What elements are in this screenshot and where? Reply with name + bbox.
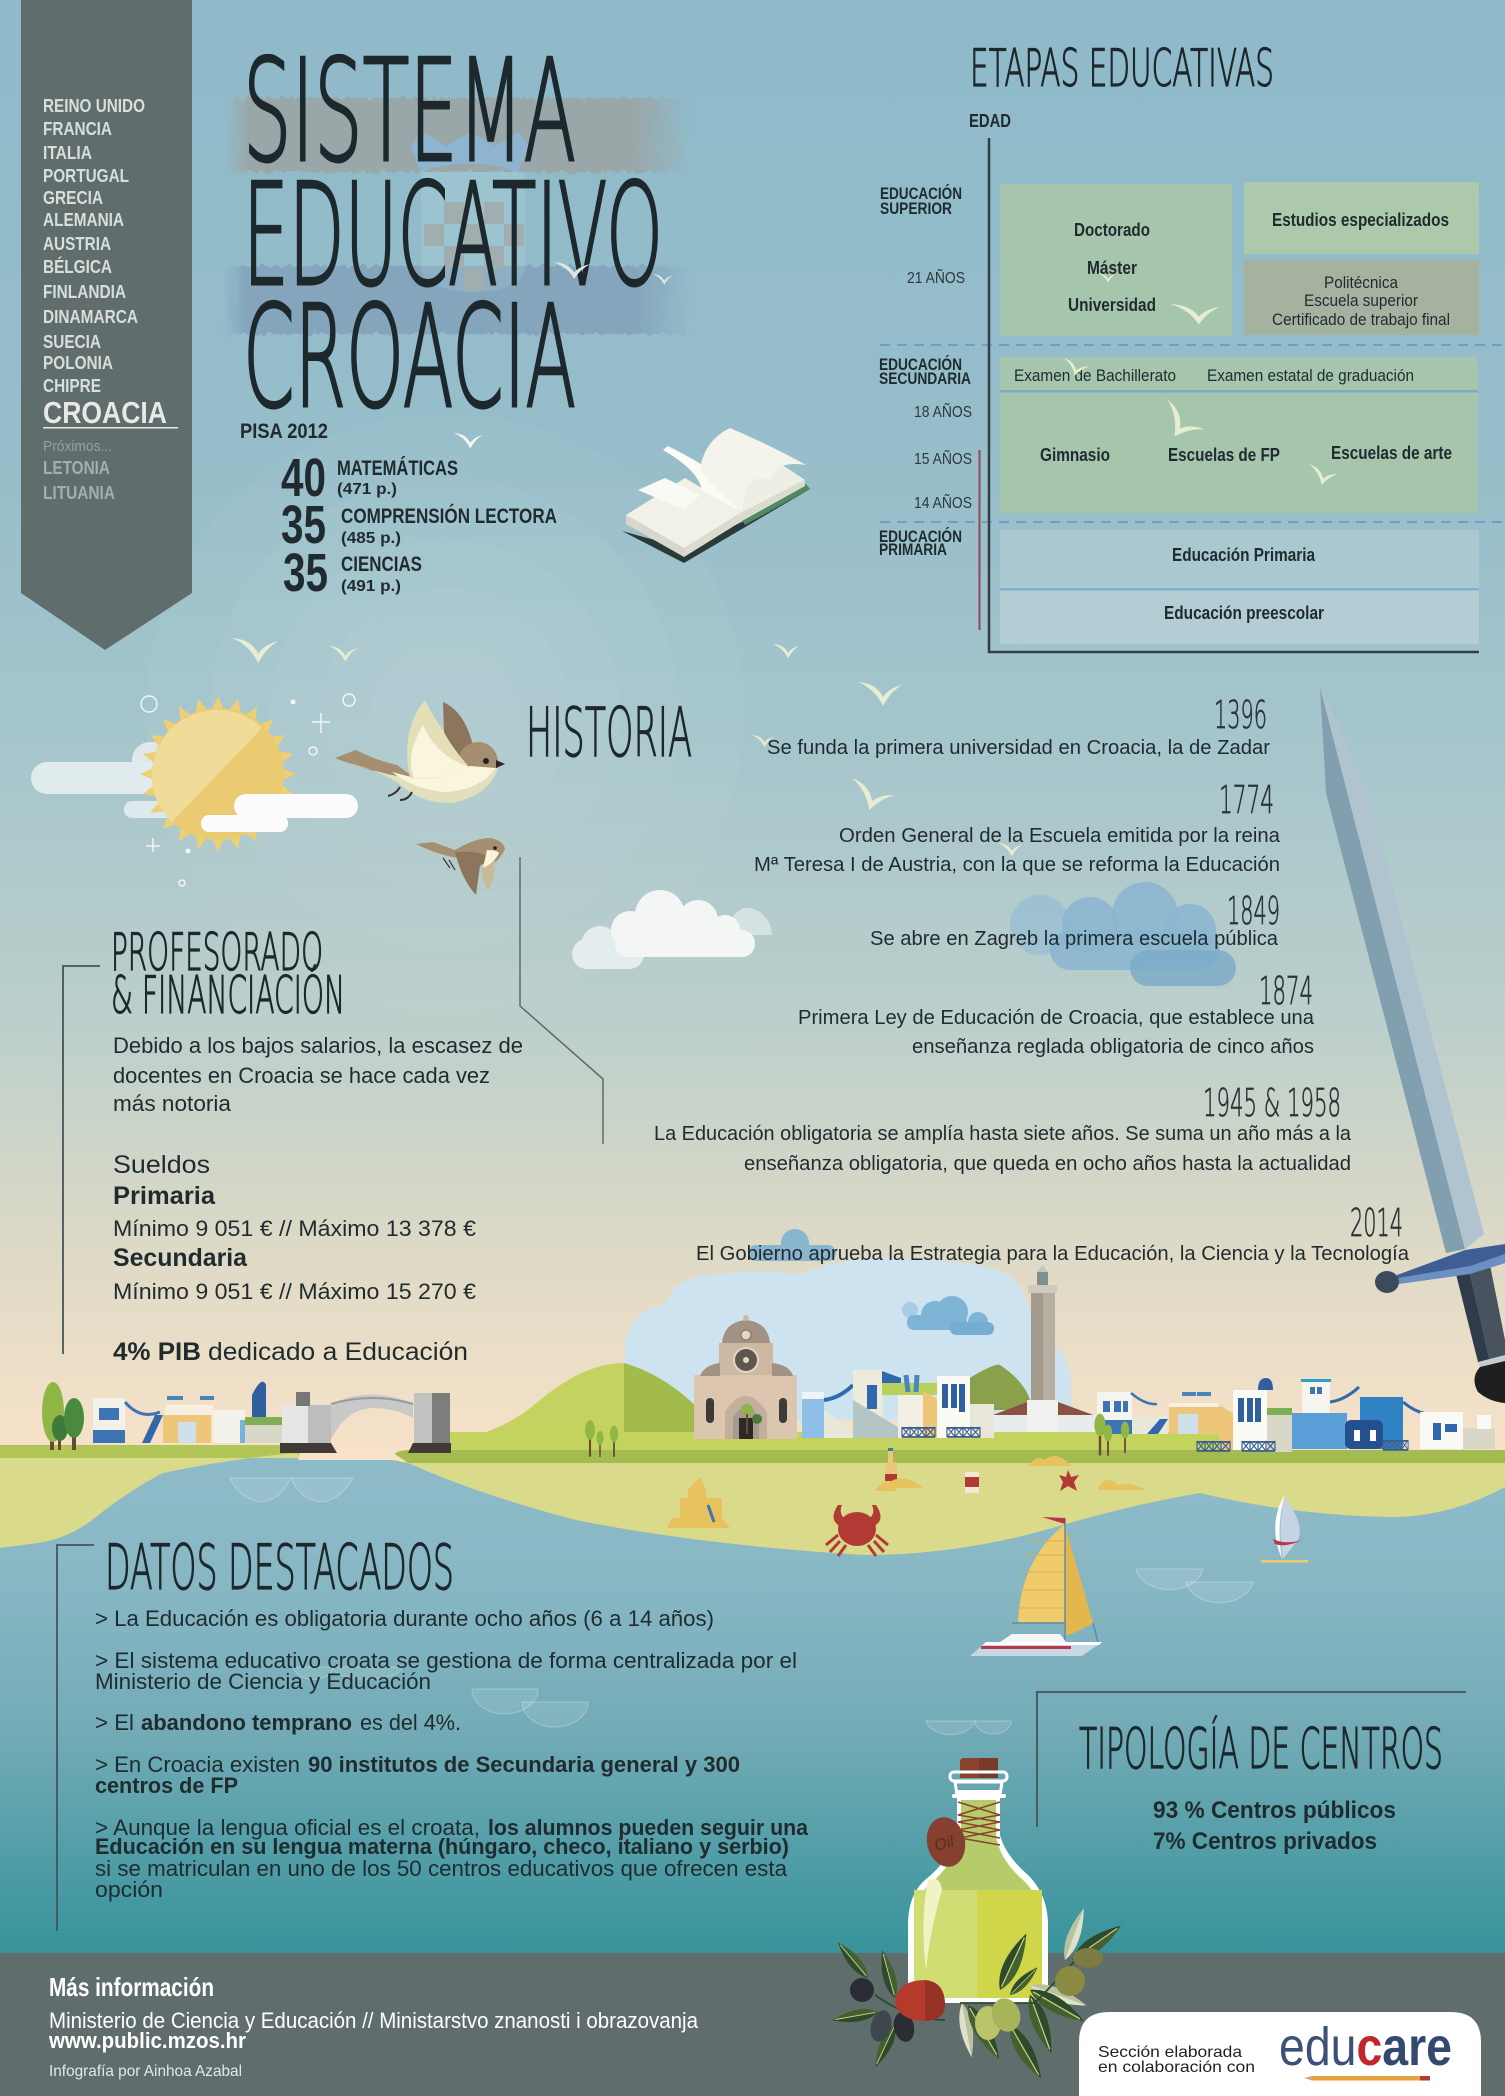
panel: etapas educativas chart: ETAPAS EDUCATIVAS [970,39,1274,99]
panel: etapas educativas chart: 18 AÑOS [914,401,972,421]
icon: sword [1320,687,1505,1403]
panel: historia timeline: enseñanza obligatoria, que queda en ocho años hasta la actualidad [744,1153,1351,1175]
panel: country list ribbon: SUECIA [43,332,101,352]
flock of small gulls [232,262,1339,856]
PISA 2012 results [240,420,557,603]
panel: country list ribbon: PORTUGAL [43,166,129,186]
panel: historia timeline: 1774 [1219,778,1274,822]
panel: country list ribbon: ITALIA [43,143,92,163]
flag brush background with Croatian crest [224,98,691,334]
icon: beer bottle [885,1448,897,1486]
bottle body [908,1790,1048,2003]
panel: etapas educativas chart: 15 AÑOS [914,448,972,468]
panel: etapas educativas chart: SUPERIOR [880,199,952,218]
panel: historia timeline: enseñanza reglada obligatoria de cinco años [912,1036,1314,1058]
title: CROACIA [243,276,576,440]
panel: datos destacados: es del 4%. [360,1710,461,1735]
icon: small sailboat [1261,1494,1308,1562]
panel: etapas educativas chart: Certificado de trabajo final [1272,310,1450,329]
panel: country list ribbon: DINAMARCA [43,307,138,327]
panel: etapas educativas chart: EDAD [969,111,1011,131]
icon: small bird [416,838,505,895]
icon: olive oil bottle with branch [831,1758,1125,2083]
icon: olive oil bottle with branch: Oil [933,1833,956,1855]
panel: datos destacados: Ministerio de Ciencia y Educación [95,1669,431,1694]
panel: profesorado y financiación: 4% PIB [113,1338,201,1366]
panel: tipología de centros [1037,1692,1466,1855]
PISA 2012 results: (491 p.) [341,578,401,595]
panel: etapas educativas chart: Politécnica [1324,273,1398,292]
panel: country list ribbon: POLONIA [43,353,113,373]
footer text: más información: Infografía por Ainhoa Azabal [49,2063,242,2080]
panel: etapas educativas chart: SECUNDARIA [879,369,971,388]
PISA 2012 results: COMPRENSIÓN LECTORA [341,504,557,528]
panel: profesorado y financiación: PROFESORADO [111,923,323,983]
panel: datos destacados: opción [95,1877,163,1902]
footer text: más información: Más información [49,1972,214,2002]
panel: profesorado y financiación: docentes en Croacia se hace cada vez [113,1063,490,1088]
panel: profesorado y financiación: & FINANCIACIÓN [111,964,345,1026]
panel: historia timeline: Primera Ley de Educación de Croacia, que establece una [798,1007,1315,1029]
panel: datos destacados: DATOS DESTACADOS [105,1531,454,1604]
oil tag [922,1814,970,1870]
icon: stone bridge [280,1392,451,1453]
panel: profesorado y financiación: Debido a los bajos salarios, la escasez de [113,1033,523,1058]
PISA 2012 results: 40 [281,448,326,508]
decorative halo rings [145,413,745,1013]
panel: country list ribbon: CHIPRE [43,376,101,396]
connector line from bird to profesorado [520,857,603,1144]
panel: etapas educativas chart: Máster [1087,258,1137,278]
panel: historia timeline: 1396 [1214,693,1267,737]
panel: etapas educativas chart: Gimnasio [1040,445,1110,465]
panel: country list ribbon: BÉLGICA [43,256,112,277]
panel: tipología de centros: 7% Centros privados [1153,1828,1377,1855]
panel: country list ribbon: CROACIA [43,395,167,430]
icon: crab [826,1505,888,1556]
panel: historia timeline: Orden General de la Escuela emitida por la reina [839,825,1281,847]
sand piles [875,1456,1146,1491]
icon: drink can [965,1472,979,1493]
panel: datos destacados: > Aunque la lengua oficial es el croata, [95,1815,480,1840]
panel: datos destacados: > El [95,1710,134,1735]
PISA 2012 results: (471 p.) [337,481,397,498]
icon: open book [622,428,810,563]
panel: etapas educativas chart: EDUCACIÓN [879,527,962,546]
panel: etapas educativas chart: Educación Primaria [1172,545,1316,565]
panel: etapas educativas chart: EDUCACIÓN [879,355,962,374]
panel: country list ribbon: REINO UNIDO [43,96,145,116]
footer text: más información [48,1972,699,2080]
panel: country list ribbon: LITUANIA [43,483,115,503]
panel: etapas educativas chart: 21 AÑOS [907,267,965,287]
panel: datos destacados: si se matriculan en uno de los 50 centros educativos que ofrecen esta [95,1856,788,1881]
panel: historia timeline: 2014 [1350,1201,1403,1245]
footer text: más información: www.public.mzos.hr [48,2028,246,2053]
panel: datos destacados: centros de FP [95,1773,238,1798]
panel: etapas educativas chart: Escuela superior [1304,291,1418,310]
trees at left [42,1382,84,1450]
panel: datos destacados [57,1531,809,1931]
panel: profesorado y financiación: Mínimo 9 051 € // Máximo 15 270 € [113,1279,476,1304]
panel: etapas educativas chart: PRIMARIA [879,540,947,559]
left village [93,1382,288,1443]
panel: country list ribbon: GRECIA [43,188,103,208]
water bowls decoration [230,1478,1253,1735]
panel: educare sponsor badge: en colaboración con [1098,2059,1255,2076]
panel: tipología de centros: 93 % Centros públicos [1153,1797,1396,1824]
right village [1097,1378,1495,1452]
PISA 2012 results: 35 [281,495,326,555]
panel: datos destacados: > La Educación es obligatoria durante ocho años (6 a 14 años) [95,1606,714,1631]
footer band [0,1953,1505,2096]
panel: country list ribbon: LETONIA [43,458,110,478]
panel: etapas educativas chart: Educación preescolar [1164,603,1324,623]
icon: cathedral [694,1315,797,1439]
PISA 2012 results: PISA 2012 [240,420,328,443]
panel: datos destacados: > En Croacia existen [95,1752,300,1777]
cork and collar [960,1758,998,1778]
panel: profesorado y financiación: dedicado a Educación [208,1338,468,1366]
panel: etapas educativas chart [879,39,1505,652]
background sea [0,1458,1505,1958]
panel: datos destacados: > El sistema educativo croata se gestiona de forma centralizada por el [95,1648,797,1673]
panel: profesorado y financiación: Mínimo 9 051 € // Máximo 13 378 € [113,1216,476,1241]
panel: datos destacados: Educación en su lengua materna (húngaro, checo, italiano y serbio) [95,1834,789,1859]
icon: sandcastle [667,1477,730,1528]
PISA 2012 results: 35 [283,543,328,603]
panel: historia timeline: Mª Teresa I de Austria, con la que se reforma la Educación [754,854,1280,876]
panel: educare sponsor badge: Sección elaborada [1098,2044,1242,2061]
panel: profesorado y financiación [63,923,523,1366]
background sky [0,0,1505,1460]
panel: historia timeline: 1945 & 1958 [1203,1081,1341,1125]
panel: datos destacados: abandono temprano [141,1710,352,1735]
panel: etapas educativas chart: Estudios especializados [1272,210,1449,230]
heading: historia: HISTORIA [526,694,692,773]
panel: historia timeline [654,693,1403,1245]
panel: etapas educativas chart: Escuelas de arte [1331,443,1452,463]
olive branch left [831,1906,1125,2083]
panel: profesorado y financiación: más notoria [113,1091,232,1116]
panel: etapas educativas chart: Examen estatal de graduación [1207,366,1414,385]
PISA 2012 results: MATEMÁTICAS [337,457,458,480]
panel: profesorado y financiación: Primaria [113,1182,216,1210]
PISA 2012 results: (485 p.) [341,530,401,547]
panel: etapas educativas chart: Doctorado [1074,220,1150,240]
small cloud in sky [902,1296,994,1335]
panel: historia timeline: La Educación obligatoria se amplía hasta siete años. Se suma un año más a la [654,1123,1352,1145]
icon: lighthouse [993,1265,1096,1432]
panel: etapas educativas chart: Universidad [1068,295,1156,315]
panel: country list ribbon [21,0,192,650]
panel: historia timeline: 1849 [1227,889,1280,933]
panel: country list ribbon: Próximos... [43,438,112,455]
central village [802,1370,994,1438]
big pale-blue cloud behind city [625,1258,1071,1420]
icon: sun with clouds [31,694,358,886]
small trees [585,1414,1129,1457]
title: EDUCATIVO [243,154,663,318]
panel: etapas educativas chart: EDUCACIÓN [880,184,962,203]
icon: blue cloud [1010,882,1236,986]
panel: etapas educativas chart: Examen de Bachillerato [1014,366,1176,385]
title [243,30,663,440]
panel: historia timeline: Se funda la primera universidad en Croacia, la de Zadar [767,737,1270,759]
footer text: más información: Ministerio de Ciencia y Educación // Ministarstvo znanosti i obrazovanja [49,2008,699,2033]
panel: profesorado y financiación: Secundaria [113,1244,248,1272]
panel: country list ribbon: FRANCIA [43,119,112,139]
icon: pencil [1304,2076,1430,2080]
panel: country list ribbon: ALEMANIA [43,210,124,230]
title: SISTEMA [243,30,576,194]
panel: datos destacados: 90 institutos de Secundaria general y 300 [308,1752,740,1777]
icon: large bird [335,700,505,803]
icon: starfish [1059,1470,1079,1491]
panel: historia timeline: 1874 [1259,969,1313,1013]
logo: educare wordmark: educare [1279,2017,1452,2077]
text: 2014 milestone: El Gobierno aprueba la Estrategia para la Educación, la Ciencia y la Tecnología [696,1243,1410,1265]
beach items [667,1448,1146,1556]
panel: country list ribbon: AUSTRIA [43,234,111,254]
small blue cloud near 2014 [748,1229,836,1261]
panel: country list ribbon: FINLANDIA [43,282,126,302]
landscape: hills and ground [0,1363,1505,1555]
icon: white cloud [572,890,772,969]
panel: etapas educativas chart: 14 AÑOS [914,492,972,512]
PISA 2012 results: CIENCIAS [341,553,422,576]
panel: datos destacados: los alumnos pueden seguir una [488,1815,809,1840]
icon: sailboat [970,1517,1102,1656]
string [958,1802,1000,1845]
panel: educare sponsor badge [1079,2012,1481,2096]
panel: historia timeline: Se abre en Zagreb la primera escuela pública [870,928,1279,950]
panel: etapas educativas chart: Escuelas de FP [1168,445,1280,465]
panel: profesorado y financiación: Sueldos [113,1151,210,1179]
